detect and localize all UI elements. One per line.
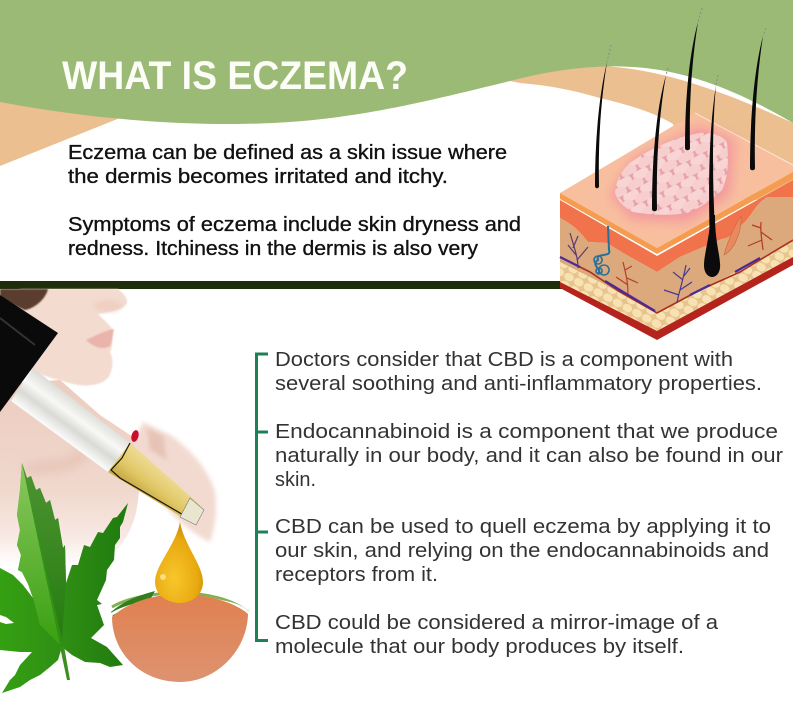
hand <box>132 422 216 542</box>
leaf centre dark half <box>22 463 66 640</box>
follicle <box>704 215 720 277</box>
text block: mirror-image: molecule that our body produces by itself. <box>275 636 684 658</box>
intro text block: redness. Itchiness in the dermis is also very <box>68 238 478 260</box>
dropper oil <box>108 443 203 525</box>
text block: doctors: Doctors consider that CBD is a component with <box>275 349 733 371</box>
text block: mirror-image <box>275 612 719 658</box>
text block: endocannabinoid: Endocannabinoid is a component that we produce <box>275 421 778 443</box>
eczema halo <box>610 126 735 222</box>
vessel trees <box>568 222 772 303</box>
white rim <box>106 599 250 686</box>
title: WHAT IS ECZEMA? <box>62 54 408 98</box>
leaf stem <box>60 646 70 680</box>
icon: cannabis leaf <box>0 463 128 693</box>
text block: quell eczema: our skin, and relying on the endocannabinoids and <box>275 540 769 562</box>
collarbone shading <box>25 450 85 470</box>
dark divider bar <box>0 281 566 289</box>
leaf hole <box>0 615 14 624</box>
text block: doctors: several soothing and anti-inflammatory properties. <box>275 373 762 395</box>
text block: mirror-image: CBD could be considered a mirror-image of a <box>275 612 719 634</box>
photo: woman's face, neck and hand <box>0 289 216 565</box>
intro text block <box>68 142 521 260</box>
hairs <box>595 22 763 250</box>
bracket <box>256 354 268 640</box>
orange edge strip <box>560 172 793 254</box>
icon: skin bowl <box>106 591 250 686</box>
eczema plaque <box>615 133 728 215</box>
fat layer <box>560 242 793 331</box>
bowl <box>112 594 248 682</box>
text block: doctors <box>275 349 762 395</box>
sweat gland <box>595 226 609 273</box>
blood vessel lines <box>560 240 793 313</box>
tan tissue layer <box>560 197 793 316</box>
red dermis layer <box>560 180 793 272</box>
icon: oil drop <box>155 522 203 603</box>
text block: endocannabinoid: naturally in our body, and it can also be found in our <box>275 445 783 467</box>
lips <box>86 329 114 348</box>
neck and chest <box>0 380 145 565</box>
text block: quell eczema: receptors from it. <box>275 564 438 586</box>
icon: dropper <box>0 295 204 525</box>
leaf centre light half <box>17 463 60 645</box>
face <box>14 289 127 385</box>
skin block top face <box>560 113 793 248</box>
header background: peach wave <box>0 66 793 200</box>
text block: endocannabinoid <box>275 421 783 491</box>
green arc <box>112 593 248 612</box>
intro text block: the dermis becomes irritated and itchy. <box>68 166 448 188</box>
nose shading <box>94 300 122 312</box>
dropper tip <box>180 498 204 525</box>
dropper black cap <box>0 295 58 412</box>
intro text block: Eczema can be defined as a skin issue where <box>68 142 507 164</box>
hair <box>0 289 48 310</box>
text block: quell eczema: CBD can be used to quell eczema by applying it to <box>275 516 771 538</box>
muscle <box>724 216 741 255</box>
header background: green wave <box>0 0 793 124</box>
text block: quell eczema <box>275 516 771 586</box>
icon: skin cross-section with eczema <box>560 8 793 340</box>
intro text block: Symptoms of eczema include skin dryness and <box>68 214 521 236</box>
text block: endocannabinoid: skin. <box>275 469 316 491</box>
red nail <box>130 429 140 443</box>
dropper glass tube <box>11 368 130 472</box>
red base layer <box>560 257 793 340</box>
